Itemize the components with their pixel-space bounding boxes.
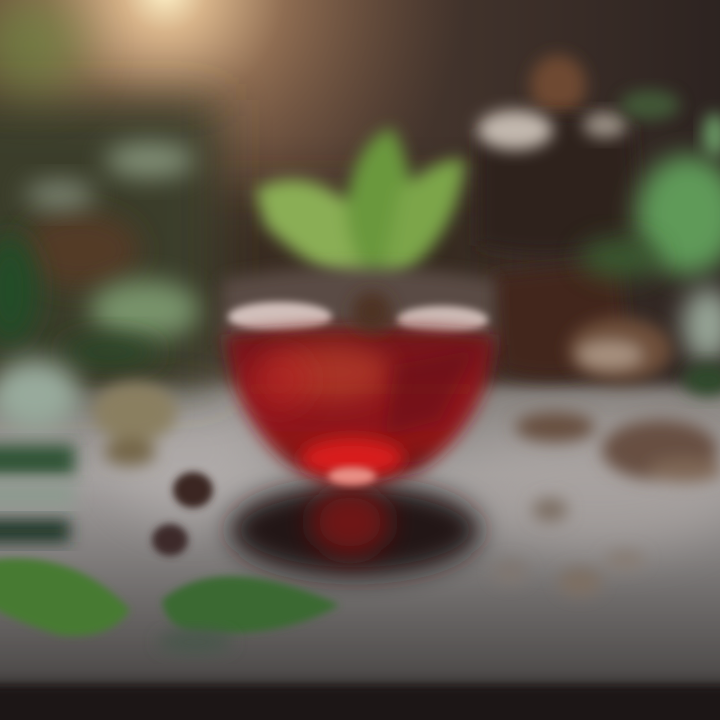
cup shadow	[230, 484, 480, 576]
tea dark folds	[385, 350, 475, 435]
tea warm reflection	[270, 344, 390, 400]
cup glass rim	[222, 268, 495, 345]
green leaf sprig	[255, 128, 465, 300]
table surface	[0, 380, 720, 685]
tea liquid	[225, 328, 495, 481]
foliage: left herb cluster	[0, 0, 220, 390]
teapot: dark pot on the right	[477, 55, 638, 378]
beans: dark berries	[152, 472, 213, 556]
table dark front edge	[0, 688, 720, 720]
spices: left pile	[93, 382, 177, 466]
foliage: front left leaves	[0, 558, 340, 654]
saucer reflection	[310, 488, 390, 556]
tea highlight	[328, 467, 376, 485]
tea bright base	[300, 438, 404, 478]
tea cup	[222, 268, 495, 485]
cup rim highlights	[228, 302, 488, 334]
foliage: right herb leaves	[580, 90, 720, 396]
foliage: left front pot of leaves	[0, 359, 80, 542]
leaf stem in cup	[352, 292, 392, 332]
background wall with warm glow	[0, 0, 720, 420]
spices: right brown pieces	[492, 318, 720, 596]
